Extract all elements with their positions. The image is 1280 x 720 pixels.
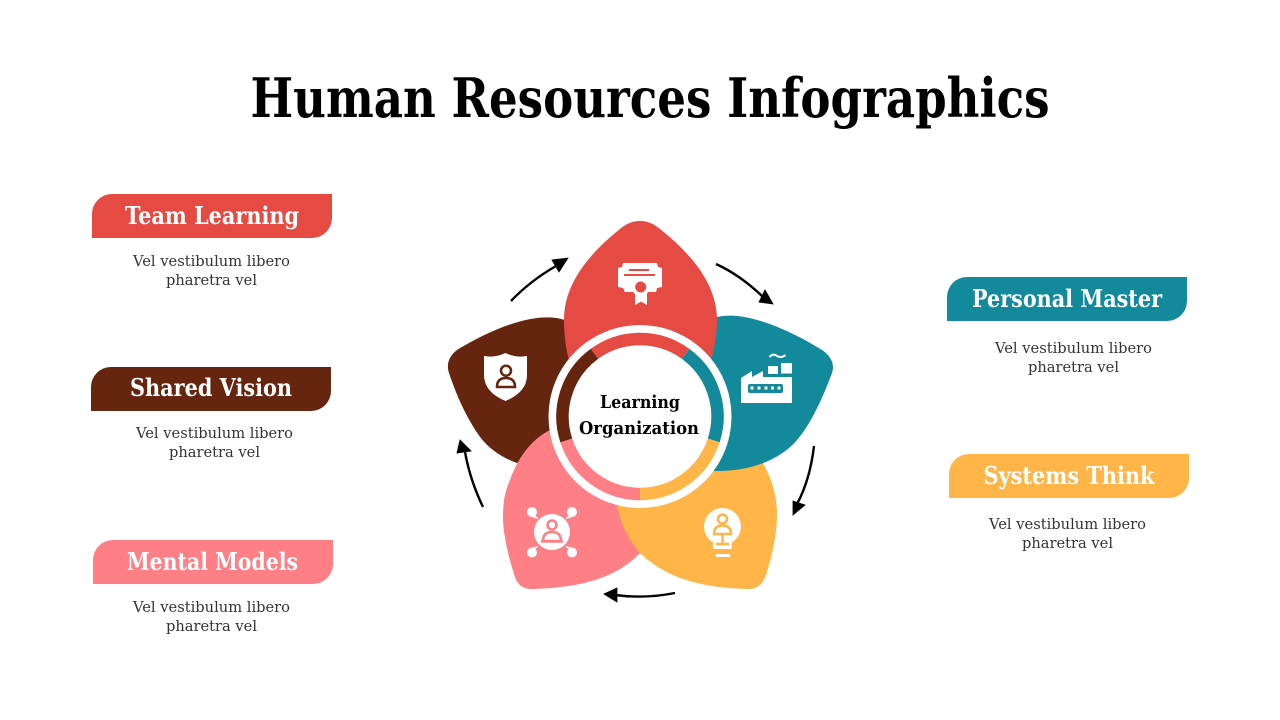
center label: Learning (600, 392, 680, 413)
icon: person with speech bubbles (527, 507, 577, 558)
arrow: orange to pink (604, 588, 675, 602)
arrow: red to teal (716, 264, 773, 304)
arrow: pink to brown (457, 440, 483, 507)
petal: pink (503, 430, 640, 589)
heading: personal master: Personal Master (972, 284, 1162, 313)
panel: mental models (93, 540, 333, 635)
text block: systems think: Vel vestibulum libero (988, 515, 1146, 533)
text block: shared vision: Vel vestibulum libero (135, 424, 293, 442)
heading: shared vision: Shared Vision (130, 373, 292, 402)
text block: systems think (988, 515, 1146, 552)
text block: mental models: Vel vestibulum libero (132, 598, 290, 616)
heading pill: systems think (949, 454, 1189, 498)
arrow: teal to orange (793, 446, 814, 515)
icon: certificate (618, 263, 662, 305)
text block: shared vision (135, 424, 293, 461)
text block: systems think: pharetra vel (1022, 534, 1113, 552)
heading: mental models: Mental Models (127, 547, 298, 576)
icon: lightbulb person (704, 508, 741, 557)
petal: teal (680, 316, 833, 471)
petal: red (564, 221, 717, 360)
heading pill: personal master (947, 277, 1187, 321)
text block: personal master: Vel vestibulum libero (994, 339, 1152, 357)
petal: orange (617, 440, 777, 589)
text block: mental models: pharetra vel (166, 617, 257, 635)
chart: five-petal cycle (448, 221, 833, 602)
text block: mental models (132, 598, 290, 635)
arrow: brown to red (511, 258, 568, 301)
panel: team learning (92, 194, 332, 289)
heading pill: shared vision (91, 367, 331, 411)
center ring (548, 325, 732, 508)
text block: personal master: pharetra vel (1028, 358, 1119, 376)
heading: team learning: Team Learning (125, 201, 299, 230)
center label: Organization (579, 418, 699, 439)
heading pill: mental models (93, 540, 333, 584)
heading pill: team learning (92, 194, 332, 238)
petal: brown (448, 317, 600, 463)
panel: personal master (947, 277, 1187, 376)
text block: shared vision: pharetra vel (169, 443, 260, 461)
text block: personal master (994, 339, 1152, 376)
heading: systems think: Systems Think (984, 461, 1156, 490)
panel: shared vision (91, 367, 331, 461)
title: Human Resources Infographics (250, 66, 1050, 130)
text block: team learning: Vel vestibulum libero (132, 252, 290, 270)
icon: factory (741, 355, 792, 403)
text block: team learning (132, 252, 290, 289)
center label (579, 392, 699, 439)
icon: shield person (484, 353, 527, 401)
text block: team learning: pharetra vel (166, 271, 257, 289)
panel: systems think (949, 454, 1189, 552)
